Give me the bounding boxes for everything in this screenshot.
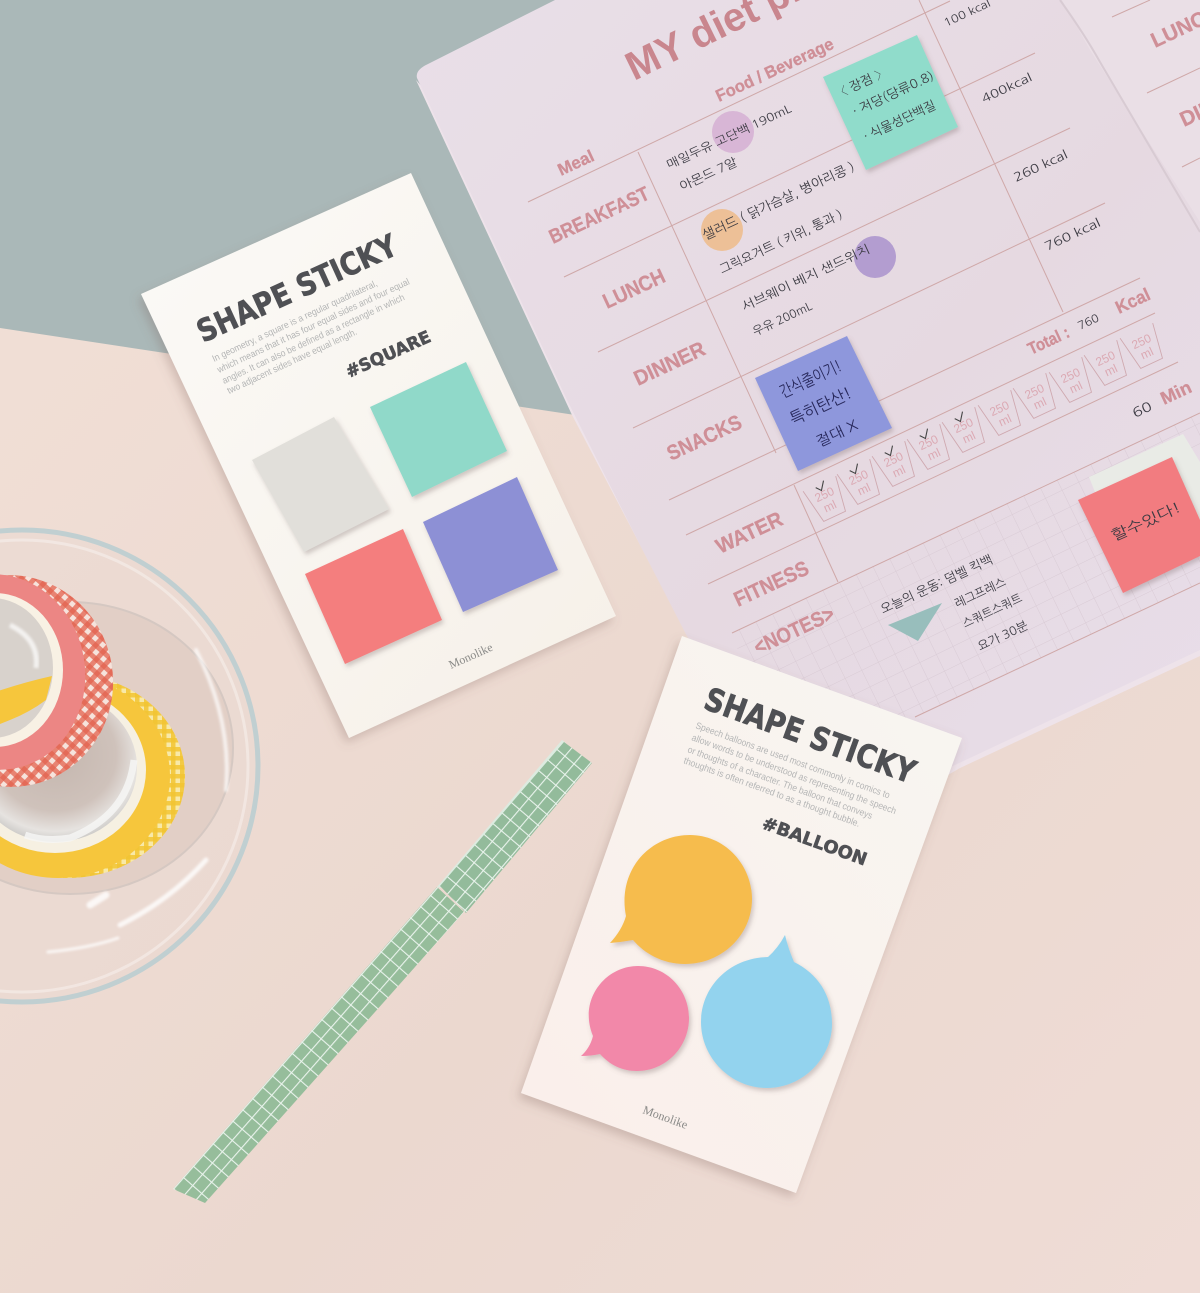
bowl inner base [0, 602, 233, 894]
cup 2 [837, 458, 885, 507]
hole highlight [10, 625, 36, 668]
card tag: #SQUARE [343, 327, 434, 383]
red gingham tape roll [0, 559, 130, 803]
min label: Min [1157, 377, 1195, 409]
red tape core [0, 593, 63, 747]
card description: or thoughts of a character. The balloon that conveys [686, 744, 874, 822]
sticky note: blue: 절대 X [814, 417, 861, 450]
card body [521, 636, 962, 1193]
card title: SHAPE STICKY [191, 228, 403, 350]
circle sticker: peach [701, 209, 743, 251]
balloon sticky: pink [581, 966, 689, 1071]
card description: allow words to be understood as representing the speech [690, 732, 898, 817]
cup 9 [1084, 340, 1132, 388]
sticky note: red: 할수있다! [1109, 500, 1183, 544]
sticky pad: red [305, 529, 442, 664]
circle sticker: lilac [712, 111, 754, 153]
balloon sticky: orange [610, 835, 752, 964]
row label: fitness: FITNESS [730, 557, 813, 612]
handwriting: dinner: 우유 200mL [751, 300, 814, 338]
cup 6 [978, 390, 1026, 438]
handwriting: exercise notes: 스쿼트스쿼트 [961, 592, 1024, 630]
cup 1 [803, 475, 851, 524]
kcal label: Kcal [1112, 284, 1153, 318]
cup 6: ml [996, 411, 1014, 429]
handwriting: kcal values: 760 [1076, 312, 1101, 332]
cup 2: 250 [846, 467, 871, 488]
sticky note: teal: · 저당(당류0.8) [850, 69, 936, 118]
sticky note: blue [755, 336, 892, 471]
sticky note: red [1078, 457, 1200, 593]
bowl highlights [48, 650, 227, 952]
cup 3 [872, 440, 920, 489]
cup 7: 250 [1022, 381, 1047, 402]
cup 10: 250 [1129, 331, 1154, 352]
bowl inner rim [0, 540, 248, 992]
handwriting: breakfast [665, 102, 794, 193]
handwriting: breakfast: 매일두유 고단백 190mL [665, 102, 794, 171]
handwriting: breakfast: 아몬드 7알 [677, 155, 739, 193]
handwriting: dinner [740, 243, 872, 338]
handwriting: kcal values: 60 [1130, 400, 1154, 420]
cup 10 [1120, 323, 1168, 371]
diary right page [1062, 0, 1200, 222]
green grid washi tape [173, 740, 592, 1203]
row label: dinner: DINNER [630, 338, 709, 391]
balloon sticky: blue [701, 935, 832, 1088]
handwriting: kcal values: 100 kcal [942, 0, 992, 29]
card description: angles. It can also be defined as a rectangle in which [221, 292, 407, 387]
sticky note: teal: 〈 장점 〉 [838, 67, 884, 98]
cup 2: ml [855, 480, 873, 498]
hole reflection [25, 760, 134, 839]
cup 3: ml [890, 462, 908, 480]
handwriting: kcal values: 760 kcal [1043, 217, 1102, 253]
handwriting: lunch: 그릭요거트 ( 키위, 통과 ) [717, 207, 844, 276]
card body [141, 173, 616, 738]
diary notes grid [732, 413, 1200, 760]
cup 6: 250 [987, 398, 1012, 419]
sticky pad: teal [370, 362, 507, 497]
handwriting: dinner: 서브웨이 베지 샌드위치 [740, 243, 872, 313]
card description: Speech balloons are used most commonly in comics to [694, 720, 891, 801]
cup 5 [942, 406, 990, 455]
brand: Monolike [641, 1103, 690, 1132]
yellow tape side [0, 674, 185, 878]
panel: open diary [416, 0, 1200, 860]
sticky pad: purple [423, 477, 558, 612]
cup 9: 250 [1093, 348, 1118, 369]
cup 8: 250 [1058, 365, 1083, 386]
row label: breakfast: BREAKFAST [546, 183, 653, 249]
bowl outer body [0, 530, 258, 1002]
column heading: food: Food / Beverage [713, 34, 837, 106]
tape upper strip [440, 742, 592, 913]
cup 5: 250 [951, 415, 976, 436]
pale sticker behind red note [1089, 434, 1200, 530]
yellow tape core [0, 687, 146, 853]
diary left page [417, 0, 1200, 846]
red tape face [0, 560, 101, 784]
sticky pad: grey [252, 417, 389, 552]
diary page stack [416, 80, 1200, 860]
glass bowl with tapes [0, 530, 258, 1002]
handwriting: lunch: 샐러드 ( 닭가슴살, 병아리콩 ) [700, 160, 856, 242]
row label: snacks: SNACKS [663, 411, 746, 466]
card description: thoughts is often referred to as a thought bubble. [682, 755, 861, 830]
sticky note: blue: 간식줄이기! [777, 357, 844, 401]
handwriting: exercise notes [878, 552, 1030, 653]
card title: SHAPE STICKY [699, 680, 922, 792]
column heading: meal: Meal [555, 146, 597, 180]
diary table lines [528, 0, 1200, 717]
row label: lunch: LUNCH [599, 265, 669, 314]
diary crease [1060, 0, 1200, 232]
yellow tape hole [0, 692, 137, 842]
card description: which means that it has four equal sides and four equal [215, 277, 411, 376]
cup 5: ml [960, 428, 978, 446]
water cups [803, 323, 1168, 524]
cup 8: ml [1067, 378, 1085, 396]
panel: balloon sticky card [521, 636, 962, 1193]
card description: In geometry, a square is a regular quadrilateral, [211, 278, 379, 365]
tape strip [173, 887, 464, 1203]
cup 3: 250 [881, 449, 906, 470]
panel: grey-blue paper [0, 0, 600, 420]
sticky note: blue: 특히탄산! [787, 384, 854, 428]
triangle sticker [888, 603, 942, 641]
handwriting: kcal values [942, 0, 1154, 420]
handwriting: exercise notes: 요가 30분 [976, 619, 1030, 653]
handwriting: kcal values: 400kcal [980, 71, 1034, 105]
row label: water: WATER [712, 508, 786, 559]
cup 8 [1049, 357, 1097, 405]
card description: two adjacent sides have equal length. [226, 327, 359, 397]
card tag: #BALLOON [759, 814, 869, 870]
red tape side [0, 559, 130, 803]
handwriting: kcal values: 260 kcal [1012, 148, 1069, 184]
row label: notes: <NOTES> [750, 602, 838, 660]
cup 9: ml [1102, 361, 1120, 379]
total label: Total : [1025, 323, 1073, 359]
panel: square sticky card [141, 173, 616, 738]
cup 4: ml [925, 445, 943, 463]
yellow tape face [0, 674, 170, 878]
yellow tape roll [0, 674, 185, 878]
cup 7 [1013, 373, 1061, 421]
tape roll edge [437, 740, 566, 888]
handwriting: exercise notes: 레그프레스 [953, 576, 1008, 610]
cup 4: 250 [916, 432, 941, 453]
cup 10: ml [1138, 344, 1156, 362]
handwriting: exercise notes: 오늘의 운동: 덤벨 킥백 [878, 552, 994, 616]
yellow tape seen through hole [0, 676, 52, 726]
red tape hole [0, 598, 53, 738]
cup 1: ml [821, 497, 839, 515]
cup 1: 250 [812, 484, 837, 505]
circle sticker: purple [854, 236, 896, 278]
sticky note: teal: · 식물성단백질 [861, 98, 938, 143]
cup 7: ml [1031, 394, 1049, 412]
cup 4 [907, 423, 955, 472]
brand: Monolike [447, 640, 495, 672]
sticky note: teal [823, 35, 958, 170]
handwriting: lunch [700, 160, 856, 276]
